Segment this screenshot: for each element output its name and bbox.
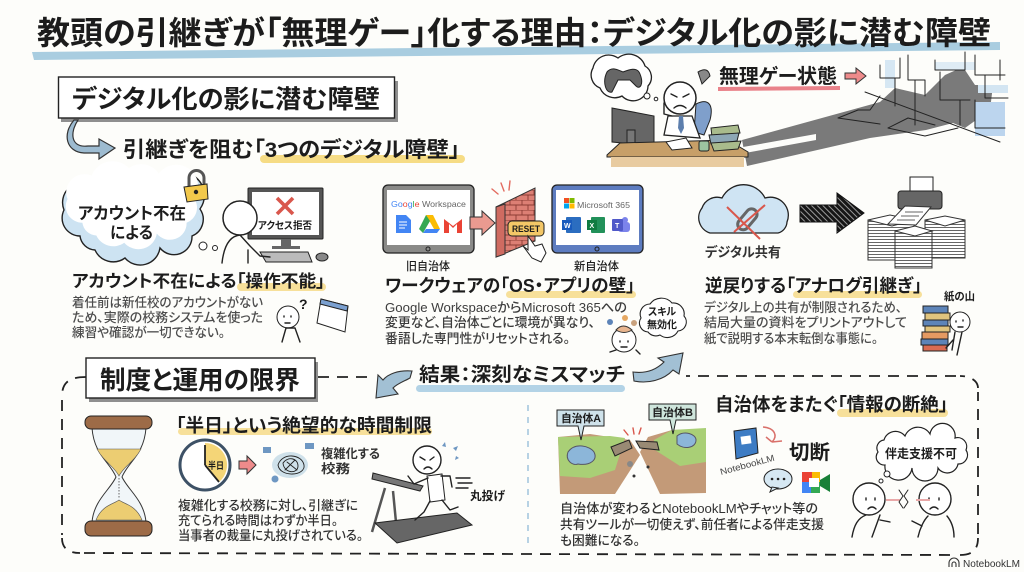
caption: new municipality: 新自治体	[574, 259, 619, 273]
reset button and hand	[508, 221, 546, 262]
text block: workware body: 変更など、自治体ごとに環境が異なり、	[385, 315, 595, 330]
text block: half day body	[178, 498, 363, 543]
tablet: Microsoft 365: X	[590, 223, 594, 230]
icon: clock half day: 半日	[208, 460, 224, 472]
text block: information break body: 自治体が変わるとNotebookLMやチャット等の	[560, 501, 818, 516]
icon: padlock	[184, 171, 208, 202]
heading: analog handover: 逆戻りする「アナログ引継ぎ」	[705, 275, 922, 296]
label: impossible game state: 無理ゲー状態	[719, 65, 837, 88]
thought bubble with game controller	[591, 54, 658, 101]
dashed frame: system limits	[62, 376, 978, 555]
section heading box: system limits	[86, 358, 318, 402]
printer and paper stacks	[868, 177, 965, 268]
tablet: Microsoft 365	[552, 185, 643, 253]
panel: account absence	[62, 161, 348, 342]
brick wall	[492, 181, 535, 257]
arrow: red curved	[763, 427, 782, 442]
panel: analog handover	[699, 177, 975, 355]
shadow on floor and wall	[742, 67, 993, 166]
section heading box: digital barriers: デジタル化の影に潜む障壁	[72, 85, 380, 114]
chair	[694, 102, 711, 135]
callout: skills nullified: スキル	[648, 306, 677, 318]
tablet: Google Workspace: Google Workspace	[391, 199, 466, 209]
icon: cloud with broken link	[699, 185, 788, 239]
label: municipality B: 自治体B	[652, 405, 693, 419]
callout: skills nullified: 無効化	[647, 318, 677, 331]
icon: NotebookLM book: NotebookLM	[719, 453, 776, 477]
icon: video meeting	[802, 472, 830, 493]
text block: workware body: Google WorkspaceからMicrosoft 365への	[385, 300, 627, 315]
desk	[607, 138, 748, 167]
tablet: Microsoft 365: W	[564, 223, 571, 230]
text block: account body: ため、実際の校務システムを使った	[72, 310, 263, 325]
icon: treadmill runner	[372, 442, 472, 543]
arrow: to sub heading	[67, 120, 115, 159]
callout: companion support impossible: 伴走支援不可	[885, 446, 957, 461]
text block: analog body: 紙で説明する本末転倒な事態に。	[704, 331, 878, 346]
text block: workware body: 番語した専門性がリセットされる。	[385, 331, 570, 346]
text block: information break body: 共有ツールが一切使えず、前任者による伴走支援	[560, 517, 824, 532]
column divider	[527, 405, 529, 545]
tablet: Microsoft 365: T	[615, 223, 620, 230]
icon: confused person	[277, 296, 308, 342]
monitor	[612, 108, 654, 149]
panel: half day limit	[85, 415, 505, 543]
icon: person with scattered brain	[607, 315, 640, 354]
arrow: to system limits	[376, 371, 412, 398]
illustration: frustrated head teacher and shadow	[591, 52, 1008, 167]
icon: tangled tasks	[263, 443, 314, 482]
icon: confused person: ?	[299, 296, 308, 312]
text block: information break body	[560, 501, 824, 548]
text block: half day body: 充てられる時間はわずか半日。	[178, 513, 338, 528]
icon: person carrying binders	[921, 306, 970, 355]
heading: information break: 自治体をまたぐ「情報の断絶」	[715, 394, 948, 415]
text block: account body	[72, 295, 263, 340]
cloud: account absent: アカウント不在	[78, 204, 186, 223]
arrow: black hatched	[800, 193, 864, 233]
label: impossible game state	[718, 65, 866, 91]
section heading box: digital barriers	[58, 77, 398, 122]
caption: old municipality: 旧自治体	[406, 259, 450, 273]
text block: half day body: 複雑化する校務に対し、引継ぎに	[178, 498, 358, 513]
section heading box: system limits: 制度と運用の限界	[100, 367, 300, 395]
computer with access denied	[248, 188, 328, 262]
heading: half day: 「半日」という絶望的な時間制限	[176, 415, 432, 436]
text block: analog body: デジタル上の共有が制限されるため、	[704, 300, 902, 315]
computer with access denied: アクセス拒否	[258, 220, 312, 232]
sub heading: 3 digital barriers: 引継ぎを阻む「3つのデジタル障壁」	[123, 137, 460, 162]
label: municipality A	[557, 410, 604, 440]
title: 教頭の引継ぎが「無理ゲー」化する理由：デジタル化の影に潜む障壁	[37, 15, 991, 51]
text block: account body: 着任前は新任校のアカウントがない	[72, 295, 263, 310]
title underline brush	[32, 42, 1000, 60]
illustration: broken bridge between cliffs	[558, 428, 706, 494]
circuit wall	[838, 52, 1008, 142]
panel: information break	[557, 394, 968, 548]
text block: half day body: 当事者の裁量に丸投げされている。	[178, 528, 363, 543]
callout: skills nullified	[639, 298, 686, 338]
text block: analog body	[704, 300, 907, 346]
arrow: red to wall	[470, 211, 495, 235]
label: municipality A: 自治体A	[561, 411, 601, 425]
heading: OS and app wall: ワークウェアの「OS・アプリの壁」	[385, 276, 635, 296]
callout: companion support impossible	[876, 423, 968, 483]
logo: NotebookLM: NotebookLM	[963, 558, 1020, 570]
result label: serious mismatch: 結果：深刻なミスマッチ	[419, 364, 625, 386]
arrow: pink pointing right	[845, 68, 866, 84]
icon: hourglass	[85, 416, 152, 536]
caption: digital sharing: デジタル共有	[705, 244, 781, 260]
person at computer	[222, 201, 270, 263]
icon: stress scribble	[698, 70, 710, 84]
label: municipality B	[649, 404, 696, 434]
label: cut off: 切断	[789, 441, 830, 464]
icon: two disconnected people	[852, 483, 954, 537]
icon: calendar	[317, 299, 348, 332]
tablet: Google Workspace	[383, 185, 474, 253]
stack of books	[709, 125, 741, 151]
caption: complex duties: 複雑化する	[321, 446, 380, 461]
person	[664, 82, 700, 138]
tablet: Microsoft 365: Microsoft 365	[577, 200, 630, 210]
text block: information break body: も困難になる。	[560, 533, 640, 548]
reset button and hand: RESET	[512, 224, 540, 235]
panel: OS and app wall	[383, 181, 686, 354]
heading: operation impossible: アカウント不在による「操作不能」	[72, 271, 325, 291]
caption: thrown entirely: 丸投げ	[470, 488, 505, 503]
text block: workware body	[385, 300, 627, 346]
icon: chat bubble	[764, 469, 792, 492]
text block: analog body: 結局大量の資料をプリントアウトして	[704, 315, 907, 330]
caption: mountain of paper: 紙の山	[944, 289, 975, 303]
caption: complex duties	[321, 446, 380, 476]
arrow: pink	[239, 456, 256, 474]
text block: account body: 練習や確認が一切できない。	[72, 325, 225, 340]
icon: clock half day	[180, 440, 230, 490]
arrow: to skills	[633, 353, 683, 382]
cloud: account absent	[62, 161, 217, 265]
cloud: account absent: による	[110, 224, 153, 242]
icon: NotebookLM book	[719, 428, 776, 477]
caption: complex duties: 校務	[321, 461, 351, 476]
